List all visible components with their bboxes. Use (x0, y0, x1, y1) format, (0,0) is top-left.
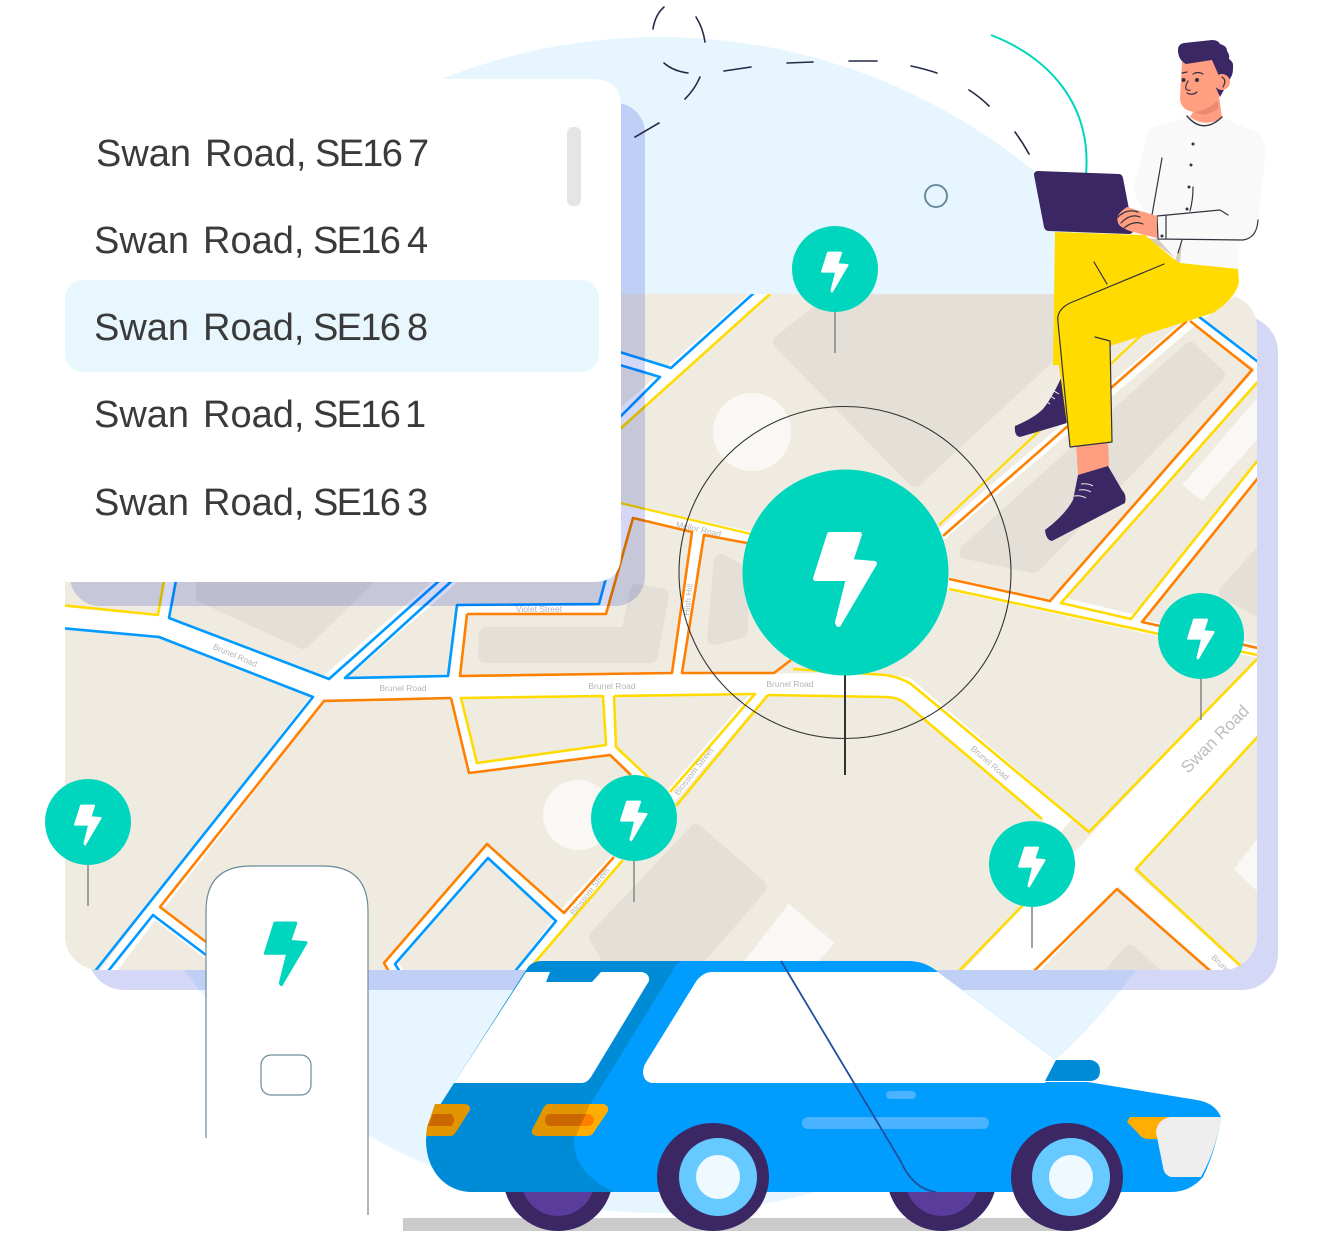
rear leg skin (1058, 360, 1068, 385)
collar (1187, 116, 1222, 126)
charging cable (781, 961, 936, 1192)
street name labels: Brunel Road (766, 679, 814, 689)
highlighted row (65, 280, 599, 372)
near wheels (657, 1123, 1123, 1231)
street name labels: Brunel Road (379, 683, 427, 693)
address list: Swan (94, 307, 189, 349)
address list (94, 133, 429, 524)
neck and face (1180, 58, 1226, 123)
dropdown shadow panel (70, 103, 645, 606)
dashed flight path (635, 7, 1029, 154)
address list: 8 (407, 307, 428, 349)
pin: lower right (989, 821, 1075, 948)
street name labels: Brunel Road (1210, 952, 1250, 993)
scrollbar (567, 127, 581, 206)
laptop (1034, 171, 1133, 234)
headlight (1127, 1117, 1221, 1177)
street name labels: Brunel Road (211, 641, 259, 669)
map building blocks (203, 301, 1262, 977)
map pale areas (543, 393, 1257, 975)
far wheels (503, 1121, 997, 1231)
ground shadow (403, 1218, 1070, 1231)
address list: Swan (94, 394, 189, 436)
address list: Road, (203, 307, 304, 349)
shirt buttons (1160, 142, 1194, 238)
pin: top (792, 226, 878, 353)
street name labels (211, 519, 1253, 993)
street name labels: Brunel Road (588, 681, 636, 691)
wing mirror (1045, 1060, 1100, 1081)
address list: 1 (405, 394, 426, 436)
white road network (65, 294, 1257, 970)
yellow road edges (60, 294, 1262, 972)
lavender backing panel (88, 316, 1278, 990)
main charging pin (742, 470, 948, 775)
address list: 7 (408, 133, 429, 175)
address list: Road, (203, 220, 304, 262)
address list: SE16 (313, 482, 400, 524)
face features (1182, 72, 1225, 94)
hand (1117, 207, 1157, 238)
address list: 4 (407, 220, 428, 262)
rear window (454, 972, 649, 1083)
address dropdown (65, 79, 621, 582)
street name labels: High Hill (681, 583, 695, 616)
street name labels: Mellor Road (675, 519, 722, 539)
range circle (679, 406, 1011, 738)
address list: Swan (94, 482, 189, 524)
car front body (574, 961, 1221, 1192)
address list: SE16 (315, 133, 402, 175)
hair (1178, 40, 1233, 97)
front shoe (1045, 466, 1126, 541)
pin: lower middle (591, 775, 677, 902)
side window (643, 972, 1056, 1083)
address list: Road, (203, 482, 304, 524)
address list: SE16 (313, 220, 400, 262)
front ankle (1076, 440, 1109, 475)
address list: Swan (96, 133, 191, 175)
teal connection curve (991, 35, 1087, 175)
pin: right (1158, 593, 1244, 720)
rear lights (426, 1104, 608, 1136)
map panel (65, 294, 1257, 970)
icon: station bolt (266, 923, 306, 984)
orange road edges (160, 321, 1262, 975)
car (426, 961, 1221, 1231)
address list: Road, (205, 133, 306, 175)
address list: 3 (407, 482, 428, 524)
address list: SE16 (313, 394, 400, 436)
man with laptop (1015, 40, 1266, 541)
street name labels: Swan Road (1177, 701, 1253, 777)
address list: SE16 (313, 307, 400, 349)
street name labels: Blossom Street (568, 865, 612, 917)
station screen (261, 1055, 311, 1095)
neck shadow (1195, 101, 1219, 115)
address list: Swan (94, 220, 189, 262)
finger lines (1117, 211, 1143, 228)
pin: far left (45, 779, 131, 906)
address list: Road, (203, 394, 304, 436)
charging station (206, 866, 368, 1215)
shirt (1133, 117, 1266, 270)
trousers (1053, 232, 1239, 447)
street name labels: Blossom Street (672, 745, 716, 797)
street name labels: Violet Street (516, 604, 563, 614)
ear (1214, 74, 1230, 90)
small ring (925, 185, 947, 207)
blue road edges (60, 292, 1262, 975)
door handle and strip (802, 1091, 989, 1129)
car rear body (426, 961, 690, 1192)
street name labels: Brunel Road (969, 743, 1011, 782)
rear shoe (1015, 376, 1067, 437)
shirt tail shadow (1145, 238, 1182, 263)
shoe laces (1036, 388, 1093, 498)
shirt lines (1152, 158, 1258, 253)
trouser lines (1058, 262, 1164, 447)
